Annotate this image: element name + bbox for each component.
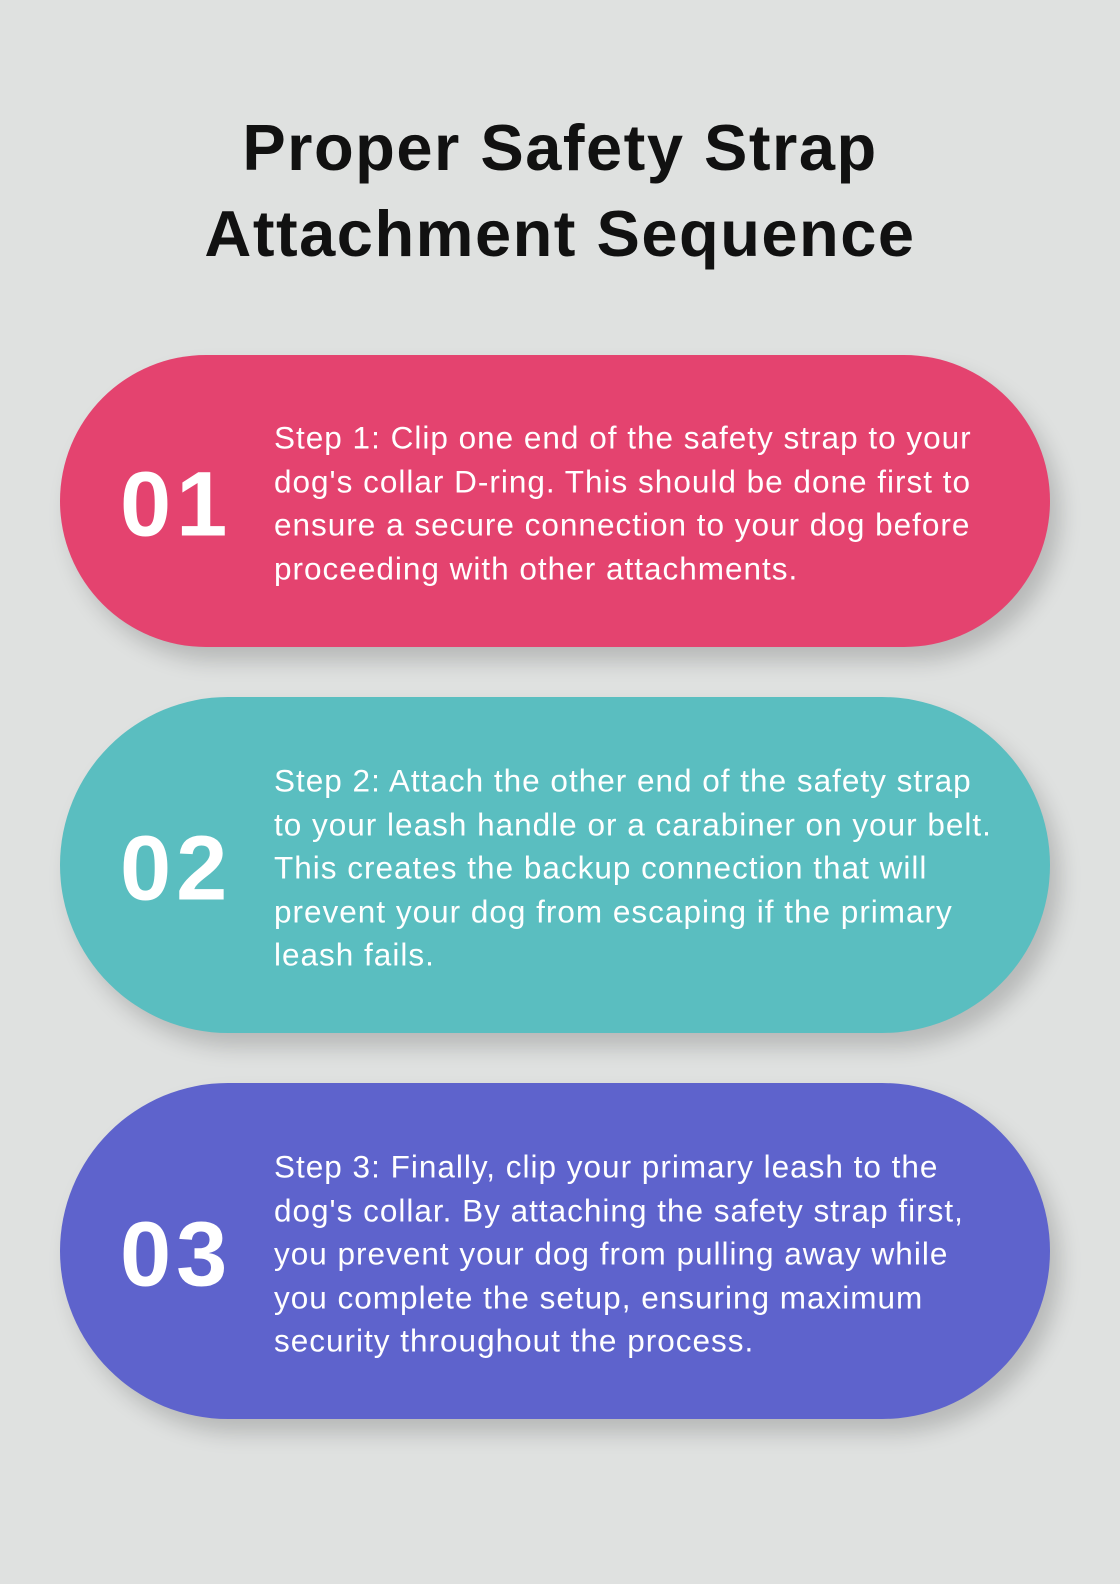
text: step 3: dog's collar. By attaching the safety strap first, — [274, 1192, 964, 1228]
title — [204, 111, 916, 270]
number 02: 02 — [120, 818, 232, 920]
text: step 2: prevent your dog from escaping if the primary — [274, 893, 953, 929]
text: step 3: you prevent your dog from pulling away while — [274, 1236, 948, 1272]
number 03: 03 — [120, 1204, 232, 1306]
panel: step 1 — [60, 355, 1050, 647]
text: step 1: ensure a secure connection to your dog before — [274, 507, 970, 543]
text: step 3: you complete the setup, ensuring maximum — [274, 1279, 923, 1315]
text: step 2 — [274, 763, 992, 973]
title: Proper Safety Strap — [242, 111, 878, 184]
title: Attachment Sequence — [204, 197, 916, 270]
panel: step 3 — [60, 1083, 1050, 1419]
text: step 3 — [274, 1149, 964, 1359]
text: step 2: Step 2: Attach the other end of the safety strap — [274, 763, 972, 799]
panel: step 2 — [60, 697, 1050, 1033]
text: step 1: Step 1: Clip one end of the safety strap to your — [274, 420, 972, 456]
text: step 2: to your leash handle or a carabiner on your belt. — [274, 806, 992, 842]
text: step 1: dog's collar D-ring. This should be done first to — [274, 463, 971, 499]
number 01: 01 — [120, 454, 232, 556]
text: step 2: leash fails. — [274, 937, 435, 973]
text: step 2: This creates the backup connection that will — [274, 850, 927, 886]
text: step 3: security throughout the process. — [274, 1323, 754, 1359]
text: step 1 — [274, 420, 972, 586]
text: step 1: proceeding with other attachments. — [274, 550, 798, 586]
text: step 3: Step 3: Finally, clip your primary leash to the — [274, 1149, 938, 1185]
